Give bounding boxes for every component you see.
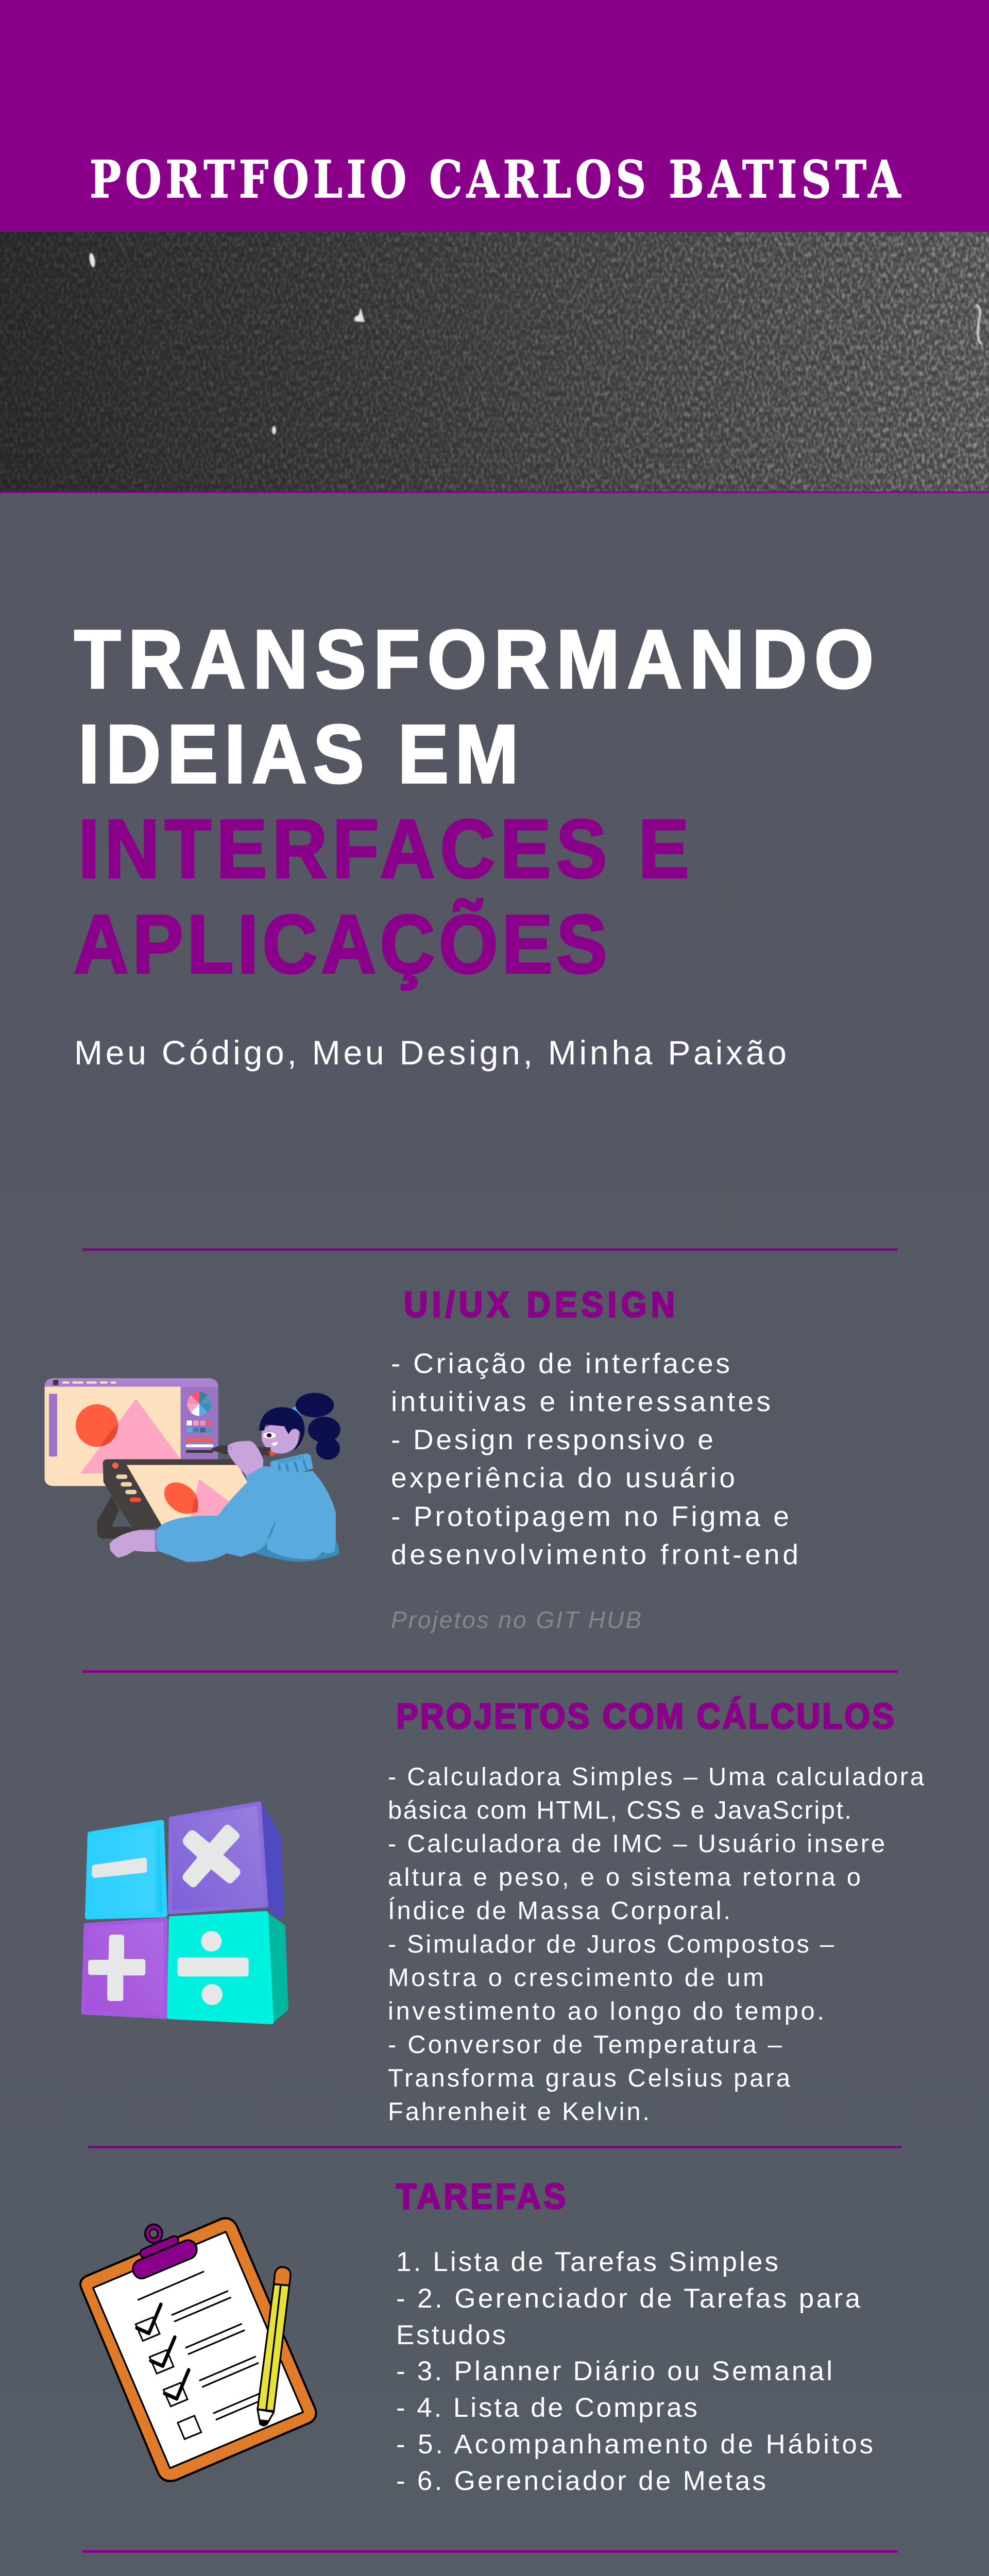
project list: Índice de Massa Corporal. (388, 1897, 730, 1925)
project list: básica com HTML, CSS e JavaScript. (388, 1797, 851, 1824)
divider (82, 2550, 898, 2553)
bullet list: - Prototipagem no Figma e (391, 1500, 789, 1532)
project list: Transforma graus Celsius para (388, 2064, 791, 2092)
task list: Estudos (396, 2320, 506, 2350)
project list: investimento ao longo do tempo. (388, 1997, 824, 2025)
hero heading: TRANSFORMANDO (74, 613, 874, 705)
icon: math cubes (83, 1803, 287, 2023)
panel: UI/UX design (45, 1285, 798, 1633)
project list: Mostra o crescimento de um (388, 1964, 764, 1992)
project list: - Simulador de Juros Compostos – (388, 1930, 834, 1958)
task list: - 6. Gerenciador de Metas (396, 2466, 766, 2496)
panel: tarefas (80, 2177, 873, 2496)
illustration: designer at tablet (45, 1378, 340, 1562)
divider (82, 1670, 898, 1673)
project list: Fahrenheit e Kelvin. (388, 2098, 650, 2126)
project list: - Conversor de Temperatura – (388, 2031, 782, 2059)
title: PORTFOLIO CARLOS BATISTA (90, 150, 901, 210)
bullet list: intuitivas e interessantes (391, 1385, 771, 1417)
hero heading: IDEIAS EM (78, 707, 519, 800)
heading: PROJETOS COM CÁLCULOS (396, 1697, 894, 1737)
project list: altura e peso, e o sistema retorna o (388, 1863, 861, 1891)
task list: 1. Lista de Tarefas Simples (396, 2247, 778, 2277)
hero heading (74, 613, 874, 990)
icon: clipboard and pencil (80, 2218, 316, 2481)
subtitle: Meu Código, Meu Design, Minha Paixão (74, 1033, 787, 1072)
project list: - Calculadora de IMC – Usuário insere (388, 1830, 885, 1858)
divider (82, 1248, 898, 1251)
task list: - 3. Planner Diário ou Semanal (396, 2356, 832, 2386)
panel: projetos com calculos (83, 1697, 925, 2126)
header band (0, 0, 989, 232)
task list: - 5. Acompanhamento de Hábitos (396, 2429, 873, 2460)
heading: UI/UX DESIGN (404, 1285, 675, 1325)
divider (88, 2146, 902, 2148)
project list: - Calculadora Simples – Uma calculadora (388, 1763, 925, 1791)
bullet list (391, 1347, 798, 1570)
heading: TAREFAS (396, 2177, 566, 2217)
link note: Projetos no GIT HUB (391, 1606, 641, 1633)
hero heading: INTERFACES E (78, 802, 689, 895)
hero heading: APLICAÇÕES (74, 897, 607, 990)
textured photo strip (0, 232, 989, 493)
bullet list: - Design responsivo e (391, 1423, 713, 1455)
task list: - 4. Lista de Compras (396, 2393, 697, 2423)
task list (396, 2247, 873, 2496)
task list: - 2. Gerenciador de Tarefas para (396, 2283, 861, 2314)
bullet list: experiência do usuário (391, 1462, 735, 1494)
bullet list: - Criação de interfaces (391, 1347, 730, 1379)
project list (388, 1763, 925, 2126)
bullet list: desenvolvimento front-end (391, 1538, 798, 1570)
